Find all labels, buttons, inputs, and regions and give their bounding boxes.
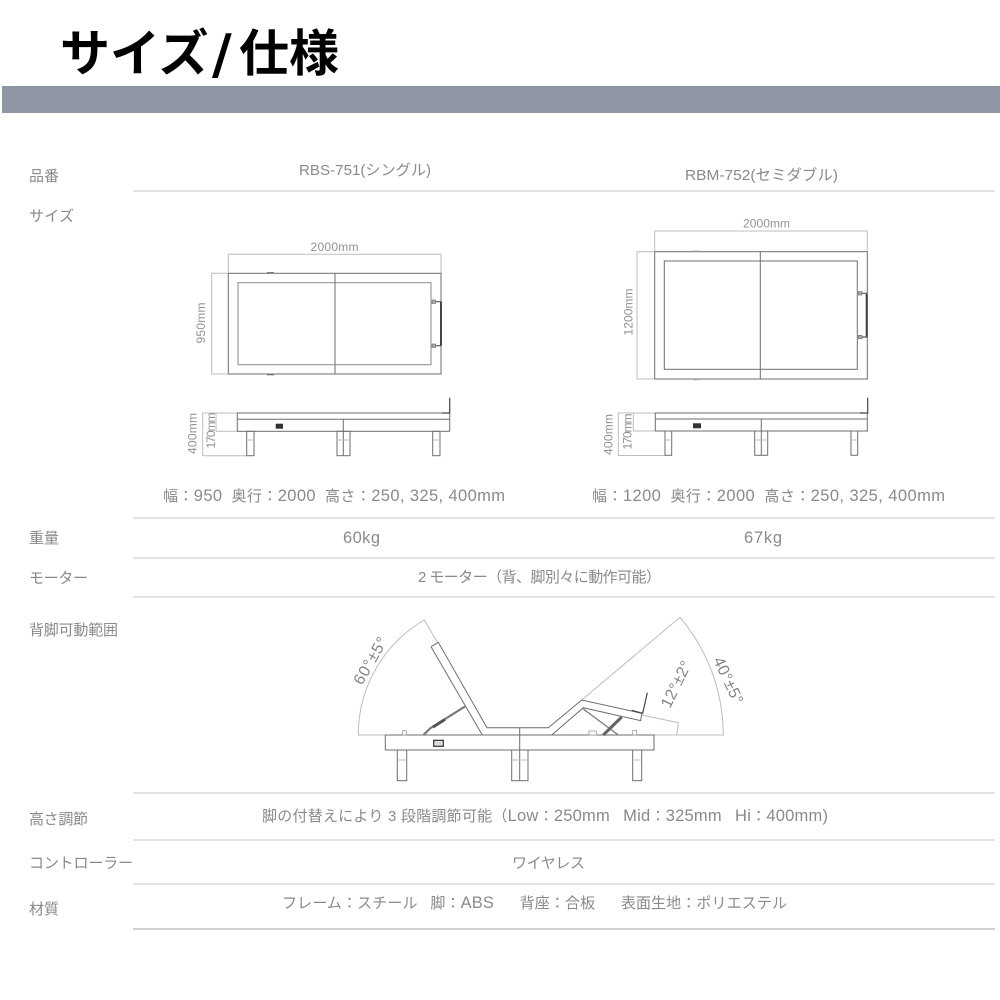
- row labels: 品番: [29, 168, 59, 185]
- weight: single: 60kg: [343, 529, 380, 547]
- dimensions: semi-double: 幅：1200 奥行：2000 高さ：250, 325, 400mm: [592, 487, 945, 505]
- diagram: semi-double side view: [602, 398, 868, 456]
- title: サイズ: [60, 26, 208, 82]
- controller value: ワイヤレス: [512, 855, 585, 872]
- controller box: [434, 740, 443, 746]
- raised profile: [431, 642, 642, 735]
- title: 仕様: [239, 26, 339, 82]
- title: /: [212, 23, 232, 86]
- height label 400: 400mm: [602, 414, 616, 455]
- row labels: サイズ: [29, 208, 74, 225]
- row labels: [29, 168, 133, 918]
- diagram: single bed side view: [186, 398, 450, 456]
- material value: フレーム：スチール 脚：ABS 背座：合板 表面生地：ポリエステル: [282, 894, 787, 912]
- diagram: reclining range: [351, 617, 746, 781]
- row dividers: [133, 191, 995, 929]
- foot flap: [632, 693, 647, 713]
- dimensions: single: 幅：950 奥行：2000 高さ：250, 325, 400mm: [163, 487, 505, 505]
- row labels: コントローラー: [29, 855, 133, 872]
- model name: single: RBS-751(シングル): [299, 162, 431, 179]
- height label 170: 170mm: [620, 414, 634, 450]
- height label 400: 400mm: [186, 413, 200, 454]
- width label: 2000mm: [743, 216, 790, 230]
- height adjustment value: 脚の付替えにより 3 段階調節可能（Low：250mm Mid：325mm Hi：400mm): [262, 807, 828, 825]
- row labels: 高さ調節: [29, 811, 88, 828]
- row labels: 材質: [29, 900, 59, 918]
- handle: [858, 293, 867, 337]
- motor value: 2 モーター（背、脚別々に動作可能）: [418, 569, 661, 586]
- angle label 12: 12°±2°: [658, 658, 696, 711]
- foot tilt guide: [642, 715, 678, 735]
- angle label 60: 60°±5°: [351, 634, 391, 688]
- diagram: single bed top view: [194, 240, 441, 375]
- bed base: [385, 735, 654, 750]
- row labels: 重量: [29, 530, 59, 547]
- model name: semi-double: RBM-752(セミダブル): [685, 166, 838, 184]
- back actuator: [424, 706, 465, 735]
- legs: [397, 750, 407, 781]
- width label: 2000mm: [310, 240, 358, 254]
- diagram: semi-double top view: [622, 216, 867, 380]
- header band: [2, 86, 1000, 113]
- weight: semi-double: 67kg: [744, 529, 782, 547]
- height label 170: 170mm: [204, 412, 218, 448]
- angle label 40: 40°±5°: [709, 655, 746, 707]
- depth label: 1200mm: [622, 288, 636, 336]
- leg actuator: [583, 709, 618, 735]
- leg section arc: [654, 617, 723, 735]
- row labels: モーター: [29, 570, 88, 587]
- handle: [433, 302, 441, 346]
- back section arc: [358, 620, 424, 735]
- row labels: 背脚可動範囲: [29, 621, 118, 639]
- depth label: 950mm: [194, 302, 208, 344]
